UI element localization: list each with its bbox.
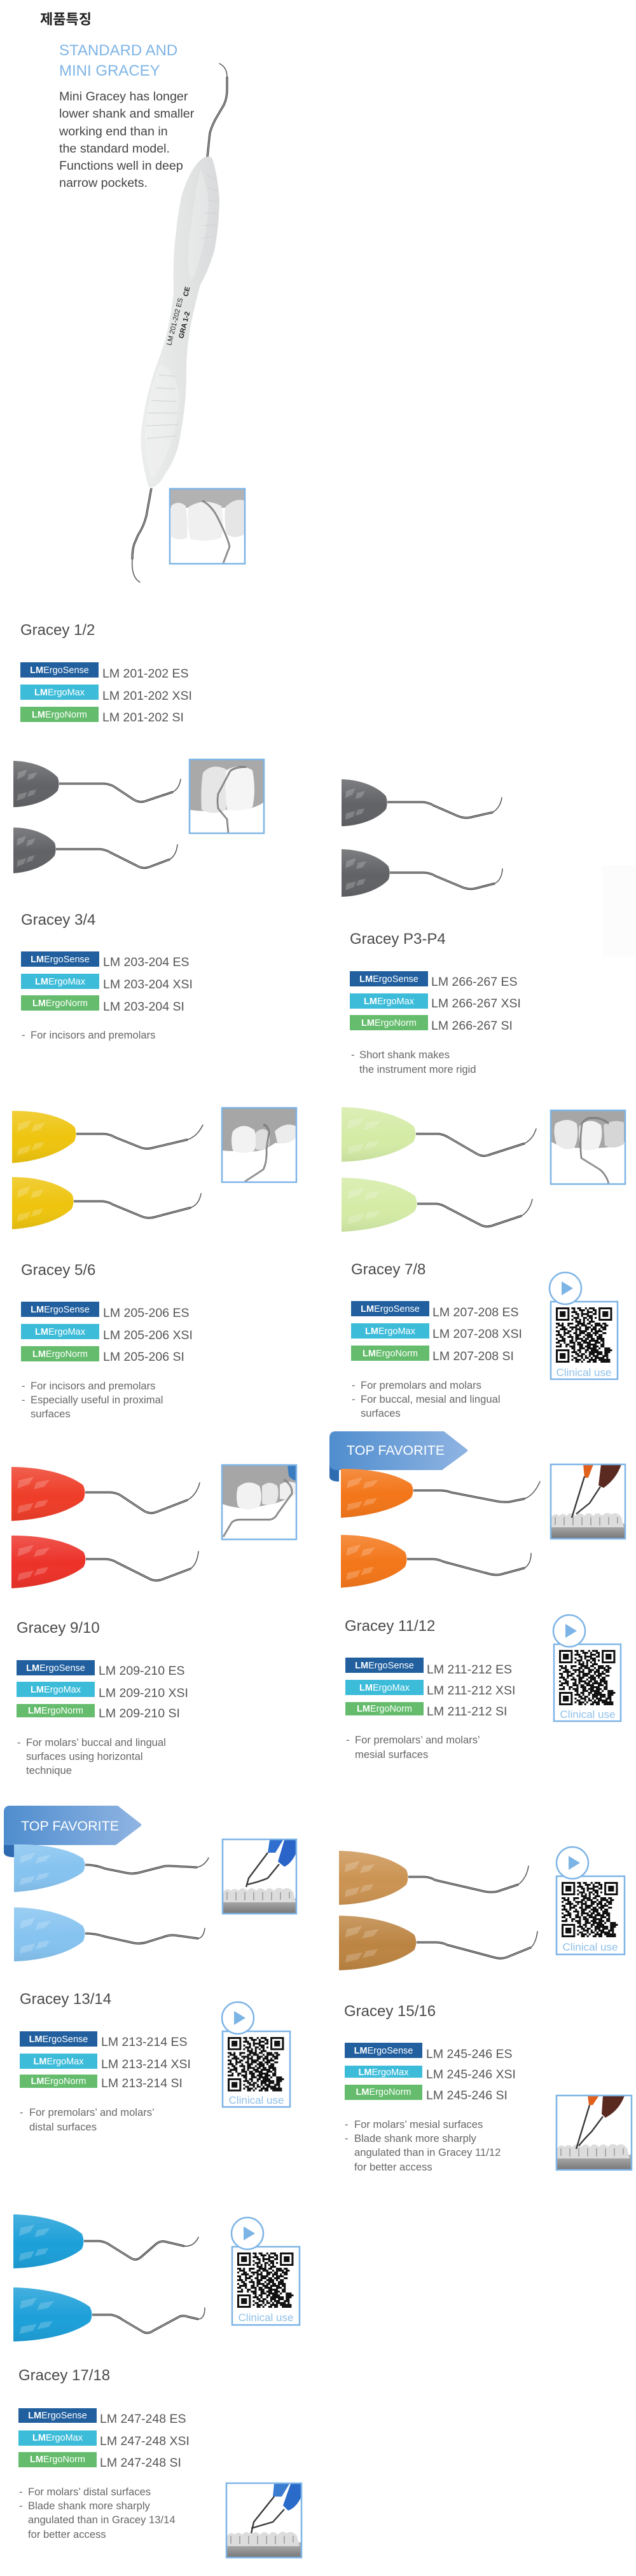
section: Gracey 13/14: LM 213-214 ES (101, 2035, 188, 2049)
section: Gracey P3-P4: the instrument more rigid (359, 1063, 476, 1075)
section: Gracey 11/12: LM 211-212 ES (427, 1663, 512, 1677)
instruments: grey pair 1/2 (13, 761, 181, 873)
section: Gracey 7/8: Gracey 7/8 (351, 1261, 425, 1278)
section: Gracey 13/14: LM 213-214 XSI (101, 2057, 191, 2071)
section: Gracey 1/2: Gracey 1/2 (20, 622, 95, 639)
section: Gracey 9/10: - (17, 1736, 21, 1748)
instruments: brown pair 15/16 (339, 1850, 537, 1970)
section: Gracey 9/10: surfaces using horizontal (26, 1750, 143, 1762)
section: Gracey 17/18: LMErgoNorm (30, 2455, 85, 2465)
photo: main tooth contact (169, 488, 245, 564)
photo: Gracey 11/12 model (550, 1464, 626, 1539)
instrument: full Gracey handle: CE (182, 286, 192, 297)
section: Gracey 15/16: Gracey 15/16 (344, 2003, 436, 2020)
badge: top favorite 13/14: TOP FAVORITE (21, 1818, 119, 1834)
instrument: full Gracey handle: LM 201-202 ES (165, 297, 184, 346)
text: intro description: working end than in (59, 125, 168, 139)
section: Gracey 1/2: LMErgoNorm (32, 710, 87, 720)
section: Gracey 9/10: LMErgoNorm (28, 1706, 83, 1716)
section: Gracey 15/16: - (345, 2132, 349, 2144)
section: Gracey 5/6: LM 205-206 SI (103, 1350, 184, 1364)
section: Gracey 1/2: LM 201-202 ES (102, 667, 189, 681)
section: Gracey 11/12: LMErgoMax (359, 1683, 410, 1693)
section: Gracey 11/12: LM 211-212 XSI (427, 1684, 515, 1698)
section: Gracey 15/16: For molars’ mesial surfaces (354, 2118, 483, 2130)
section: Gracey 15/16: - (345, 2118, 349, 2130)
QR: clinical use 15/16: Clinical use (563, 1941, 618, 1953)
photo: Gracey 1/2 clinical (189, 759, 265, 834)
section: Gracey P3-P4 (350, 930, 521, 1075)
title: standard and mini gracey: MINI GRACEY (59, 62, 160, 79)
section: Gracey 3/4: For incisors and premolars (31, 1029, 155, 1041)
section: Gracey 13/14: distal surfaces (29, 2121, 97, 2133)
section: Gracey 13/14: Gracey 13/14 (20, 1991, 111, 2008)
QR: clinical use 13/14 (222, 2002, 290, 2107)
section: Gracey 15/16 (344, 2003, 516, 2173)
section: Gracey 7/8: surfaces (361, 1407, 401, 1419)
section: Gracey 13/14: LMErgoSense (29, 2034, 88, 2045)
text: intro description: narrow pockets. (59, 176, 148, 190)
section: Gracey 17/18: Gracey 17/18 (18, 2367, 110, 2384)
photo: Gracey 17/18 model (226, 2483, 302, 2558)
section: Gracey 9/10: For molars’ buccal and lingual (26, 1736, 166, 1748)
section: Gracey 17/18: Blade shank more sharply (28, 2500, 151, 2512)
section: Gracey 15/16: LM 245-246 SI (426, 2089, 508, 2102)
section: Gracey 11/12: mesial surfaces (355, 1748, 428, 1761)
section: Gracey 9/10: LMErgoSense (26, 1663, 85, 1673)
section: Gracey 15/16: for better access (354, 2161, 432, 2173)
QR: clinical use 15/16 (556, 1847, 625, 1954)
section: Gracey 3/4: LM 203-204 SI (103, 1000, 184, 1014)
photo: Gracey 5/6 clinical (221, 1107, 297, 1183)
section: Gracey 11/12: LMErgoSense (355, 1661, 414, 1671)
section: Gracey 7/8 (351, 1261, 522, 1419)
section: Gracey 5/6: - (22, 1380, 25, 1392)
photo: Gracey 15/16 model (556, 2095, 632, 2171)
section: Gracey 13/14 (20, 1991, 191, 2133)
section: Gracey 5/6: LM 205-206 ES (103, 1306, 190, 1320)
section: Gracey 17/18: For molars’ distal surfaces (28, 2486, 151, 2498)
instruments: grey pair P3-P4 (342, 779, 502, 897)
section: Gracey 1/2: LMErgoSense (30, 665, 89, 676)
instrument: full Gracey handle (132, 64, 227, 582)
QR: clinical use 13/14: Clinical use (229, 2094, 284, 2106)
text: intro description: lower shank and smaller (59, 107, 195, 121)
section: Gracey 15/16: LMErgoNorm (356, 2087, 411, 2097)
section: Gracey 13/14: LMErgoNorm (31, 2076, 86, 2087)
instruments: blue pair 17/18 (13, 2214, 205, 2341)
section: Gracey 11/12: For premolars’ and molars’ (355, 1734, 480, 1746)
badge: top favorite 13/14 (4, 1806, 141, 1857)
section: Gracey 7/8: - (352, 1379, 356, 1391)
section: Gracey P3-P4: LM 266-267 SI (431, 1019, 513, 1033)
text: intro description: Functions well in deep (59, 159, 183, 173)
section: Gracey 17/18: LM 247-248 ES (100, 2412, 186, 2426)
badge: top favorite 11/12 (329, 1431, 467, 1482)
photo: Gracey 13/14 model (222, 1839, 297, 1914)
instruments: yellow pair 5/6 (12, 1108, 203, 1229)
section: Gracey 5/6: For incisors and premolars (31, 1380, 155, 1392)
section: Gracey 9/10: LMErgoMax (31, 1685, 81, 1695)
section: Gracey 5/6: LM 205-206 XSI (103, 1328, 193, 1342)
heading: product features: 제품특징 (40, 11, 92, 27)
section: Gracey 13/14: LM 213-214 SI (101, 2076, 183, 2090)
section: Gracey 9/10 (17, 1619, 188, 1776)
section: Gracey 7/8: LMErgoNorm (363, 1349, 418, 1359)
section: Gracey 11/12: - (346, 1734, 350, 1746)
photo: Gracey 7/8 clinical (550, 1110, 626, 1185)
section: Gracey 17/18: LM 247-248 SI (100, 2456, 181, 2470)
photo: Gracey 9/10 clinical (221, 1464, 297, 1540)
section: Gracey 5/6: surfaces (31, 1408, 71, 1420)
section: Gracey 17/18: - (19, 2486, 23, 2498)
title: standard and mini gracey (59, 42, 177, 79)
section: Gracey 15/16: LM 245-246 ES (426, 2047, 513, 2061)
QR: clinical use 17/18: Clinical use (238, 2312, 293, 2324)
section: Gracey 9/10: LM 209-210 ES (99, 1664, 185, 1678)
text: intro description (59, 90, 195, 190)
section: Gracey P3-P4: Gracey P3-P4 (350, 930, 446, 948)
instruments: orange pair 11/12 (341, 1466, 540, 1588)
section: Gracey P3-P4: Short shank makes (359, 1049, 450, 1061)
section: Gracey 3/4: LM 203-204 XSI (103, 978, 193, 992)
section: Gracey 5/6 (21, 1262, 193, 1420)
QR: clinical use 11/12 (553, 1615, 621, 1721)
section: Gracey 17/18: LMErgoMax (32, 2433, 83, 2443)
section: Gracey 15/16: LM 245-246 XSI (426, 2068, 516, 2082)
section: Gracey 9/10: technique (26, 1764, 72, 1776)
section: Gracey 17/18: for better access (28, 2528, 106, 2540)
section: Gracey 11/12 (345, 1618, 515, 1761)
section: Gracey P3-P4: LMErgoMax (364, 997, 415, 1007)
section: Gracey 7/8: LMErgoSense (361, 1304, 420, 1314)
section: Gracey 11/12: LMErgoNorm (357, 1704, 412, 1714)
section: Gracey 7/8: LM 207-208 SI (432, 1349, 514, 1363)
section: Gracey 5/6: Especially useful in proximal (31, 1394, 163, 1406)
section: Gracey 5/6: Gracey 5/6 (21, 1262, 95, 1279)
text: intro description: Mini Gracey has longer (59, 90, 188, 104)
section: Gracey 1/2 (20, 622, 192, 725)
section: Gracey 3/4: LMErgoMax (35, 977, 86, 987)
section: Gracey P3-P4: LMErgoSense (359, 974, 418, 985)
section: Gracey 15/16: angulated than in Gracey 11/12 (354, 2146, 501, 2158)
section: Gracey 7/8: For buccal, mesial and lingual (361, 1393, 501, 1405)
section: Gracey 9/10: Gracey 9/10 (17, 1619, 100, 1637)
section: Gracey P3-P4: LM 266-267 ES (431, 975, 518, 989)
section: Gracey 3/4: LM 203-204 ES (103, 955, 190, 969)
instruments: red pair 9/10 (11, 1466, 200, 1588)
section: Gracey 5/6: - (22, 1394, 25, 1406)
section: Gracey 17/18: LMErgoSense (28, 2411, 87, 2421)
section: Gracey 7/8: For premolars and molars (361, 1379, 481, 1391)
section: Gracey 3/4: LMErgoSense (31, 955, 90, 965)
section: Gracey P3-P4: LM 266-267 XSI (431, 997, 521, 1011)
section: Gracey 17/18: LM 247-248 XSI (100, 2434, 190, 2448)
section: Gracey 1/2: LM 201-202 SI (102, 711, 184, 725)
section: Gracey 1/2: LM 201-202 XSI (102, 689, 192, 703)
section: Gracey 7/8: LM 207-208 XSI (432, 1327, 522, 1341)
section: Gracey 11/12: LM 211-212 SI (427, 1705, 507, 1719)
section: Gracey 7/8: LMErgoMax (365, 1326, 416, 1337)
section: Gracey 7/8: LM 207-208 ES (432, 1305, 519, 1319)
section: Gracey 9/10: LM 209-210 SI (99, 1707, 180, 1721)
instruments: light blue pair 13/14 (14, 1841, 209, 1961)
section: Gracey 9/10: LM 209-210 XSI (99, 1686, 188, 1700)
section: Gracey P3-P4: - (351, 1049, 355, 1061)
section: Gracey 11/12: Gracey 11/12 (345, 1618, 435, 1635)
section: Gracey 3/4: - (22, 1029, 25, 1041)
QR: clinical use 17/18 (232, 2218, 300, 2325)
text: intro description: the standard model. (59, 142, 170, 156)
section: Gracey 13/14: LMErgoMax (34, 2057, 84, 2067)
section: Gracey 1/2: LMErgoMax (34, 688, 85, 698)
section: Gracey 7/8: - (352, 1393, 356, 1405)
section: Gracey 17/18: - (19, 2500, 23, 2512)
title: standard and mini gracey: STANDARD AND (59, 42, 177, 59)
section: Gracey 5/6: LMErgoNorm (32, 1349, 88, 1360)
QR: clinical use 7/8: Clinical use (556, 1366, 611, 1379)
section: Gracey 15/16: Blade shank more sharply (354, 2132, 477, 2144)
section: Gracey 15/16: LMErgoSense (354, 2046, 413, 2056)
section: Gracey P3-P4: LMErgoNorm (361, 1018, 417, 1028)
section: Gracey 5/6: LMErgoMax (35, 1327, 86, 1337)
instruments: green pair 7/8 (342, 1107, 536, 1232)
section: Gracey 3/4: Gracey 3/4 (21, 911, 95, 929)
section: Gracey 3/4 (21, 911, 193, 1041)
section: Gracey 15/16: LMErgoMax (359, 2068, 409, 2078)
section: Gracey 5/6: LMErgoSense (31, 1305, 90, 1315)
section: Gracey 17/18: angulated than in Gracey 13/14 (28, 2514, 176, 2526)
instrument: full Gracey handle: GRA 1-2 (177, 311, 191, 339)
QR: clinical use 7/8 (550, 1272, 618, 1379)
section: Gracey 13/14: For premolars’ and molars’ (29, 2106, 155, 2118)
badge: top favorite 11/12: TOP FAVORITE (347, 1443, 445, 1458)
section: Gracey 17/18 (18, 2367, 190, 2540)
section: Gracey 13/14: - (20, 2106, 24, 2118)
QR: clinical use 11/12: Clinical use (560, 1708, 615, 1721)
section: Gracey 3/4: LMErgoNorm (32, 998, 88, 1009)
